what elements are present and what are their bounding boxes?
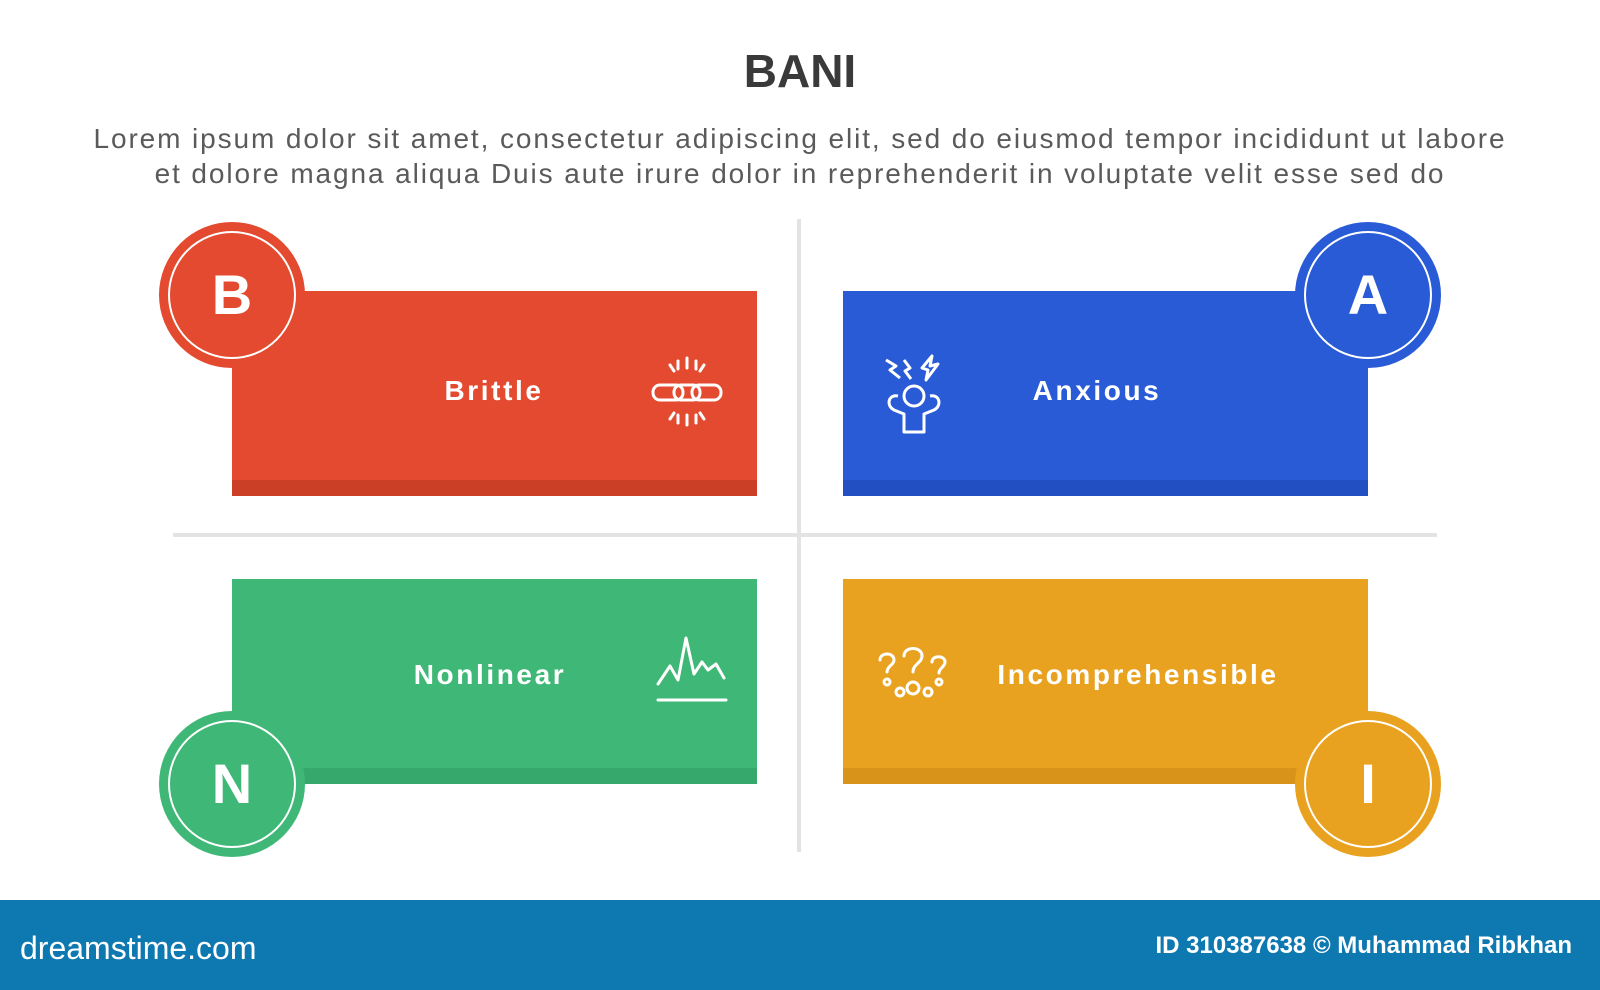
subtitle: [94, 123, 1506, 189]
subtitle: et dolore magna aliqua Duis aute irure dolor in reprehenderit in voluptate velit esse sed do: [155, 158, 1445, 189]
circle B: [159, 222, 305, 368]
footer credit: ID 310387638 © Muhammad Ribkhan: [1155, 932, 1572, 959]
icon: stressed person: [885, 354, 940, 434]
label brittle: Brittle: [444, 375, 544, 406]
footer logo: dreamstime.com: [20, 930, 256, 966]
panel: incomprehensible: [843, 579, 1368, 784]
panel: nonlinear: [232, 579, 757, 784]
label incomprehensible: Incomprehensible: [997, 659, 1279, 690]
icon: question marks: [878, 647, 946, 698]
icon: broken chain: [652, 356, 722, 426]
circle I: [1295, 711, 1441, 857]
panel: brittle: [232, 291, 757, 496]
circle N: [159, 711, 305, 857]
footer: [0, 900, 1600, 990]
circle A: A: [1348, 263, 1388, 326]
circle N: N: [212, 752, 252, 815]
circle A: [1295, 222, 1441, 368]
icon: line chart: [656, 636, 728, 702]
circle B: B: [212, 263, 252, 326]
panel: anxious: [843, 291, 1368, 496]
label nonlinear: Nonlinear: [414, 659, 566, 690]
label anxious: Anxious: [1033, 375, 1161, 406]
circle I: I: [1360, 752, 1376, 815]
subtitle: Lorem ipsum dolor sit amet, consectetur adipiscing elit, sed do eiusmod tempor incididunt ut labore: [94, 123, 1506, 154]
title: BANI: [744, 45, 856, 97]
